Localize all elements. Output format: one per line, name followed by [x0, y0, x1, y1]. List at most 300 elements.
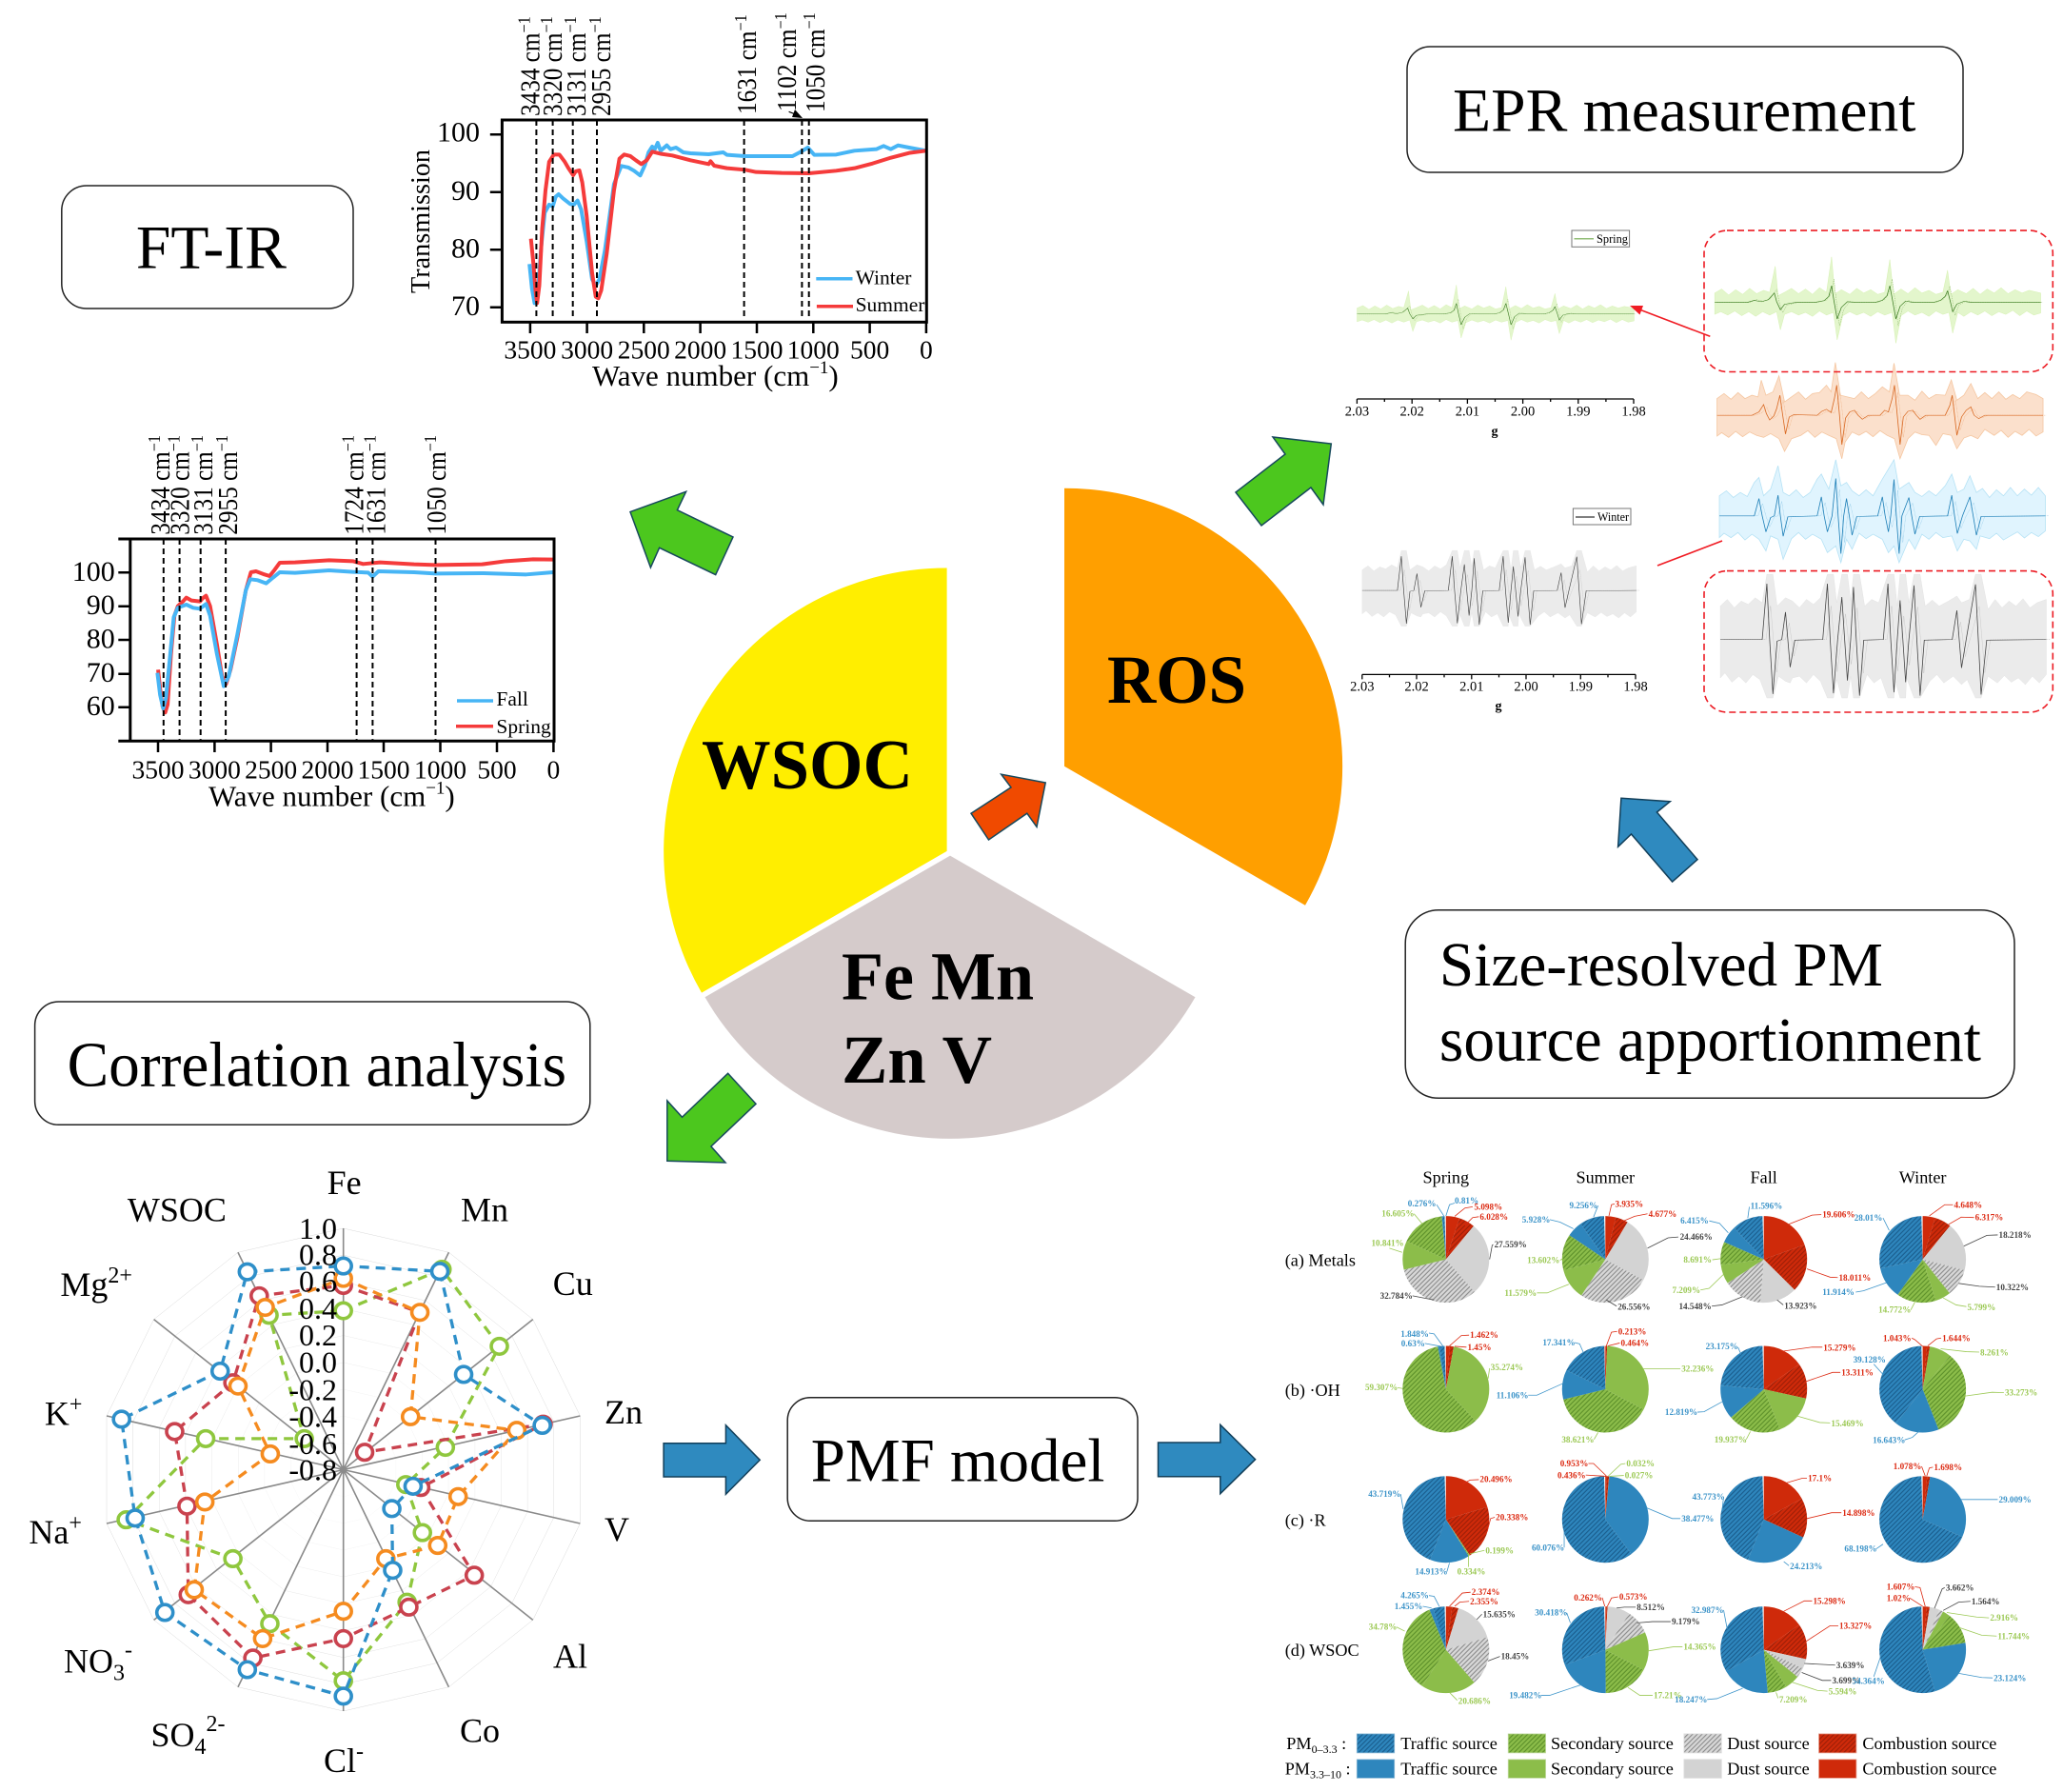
EPR spring axis: 1.98 — [1621, 404, 1646, 419]
pie: metals summer: 11.579% — [1504, 1288, 1537, 1298]
pie: R summer: 0.032% — [1626, 1459, 1655, 1468]
legend: PM size fractions and sources: Secondary source — [1551, 1760, 1674, 1779]
pie: R summer: 0.953% — [1560, 1459, 1588, 1468]
pie: R spring: 14.913% — [1415, 1566, 1448, 1576]
pie: R winter: 1.698% — [1934, 1463, 1962, 1472]
pie: WSOC fall: 3.639% — [1836, 1661, 1864, 1670]
pie: OH spring: 1.462% — [1470, 1330, 1498, 1340]
pie: WSOC fall: 3.699% — [1832, 1676, 1860, 1685]
pie: R spring: 20.496% — [1479, 1475, 1513, 1484]
pie: metals winter: 14.772% — [1878, 1305, 1911, 1315]
pie: R spring: 0.334% — [1458, 1566, 1485, 1576]
pie: metals winter: 11.914% — [1822, 1287, 1855, 1297]
EPR spring axis: 2.00 — [1511, 404, 1535, 419]
legend: PM size fractions and sources: Dust source — [1727, 1760, 1810, 1779]
heading box: EPR measurement — [1407, 47, 1963, 172]
chart: FT-IR winter and summer spectra: 3434 cm — [515, 33, 546, 116]
heading box: Size-resolved PM source apportionment — [1405, 910, 2014, 1098]
pie: WSOC summer — [1509, 1592, 1716, 1701]
pie: OH fall: 15.469% — [1831, 1419, 1864, 1428]
chart: FT-IR fall and spring spectra: 1631 cm — [361, 451, 391, 535]
pie: R fall: 14.898% — [1842, 1508, 1875, 1518]
pie: metals summer — [1504, 1199, 1713, 1312]
chart: FT-IR winter and summer spectra: 2955 cm — [586, 33, 616, 116]
chart: FT-IR winter and summer spectra: 3500 — [504, 335, 556, 365]
legend: PM size fractions and sources: Combustion source — [1862, 1760, 1996, 1779]
chart: FT-IR winter and summer spectra: −1 — [585, 16, 605, 33]
radar value scale: -0.2 — [288, 1372, 337, 1406]
pie: R summer — [1532, 1459, 1714, 1552]
season headers — [1423, 1168, 1946, 1187]
radar axis labels: - — [356, 1740, 364, 1764]
pie: metals summer: 9.256% — [1569, 1201, 1597, 1210]
segment: ROS — [1064, 488, 1342, 906]
pie: WSOC winter: 2.916% — [1990, 1613, 2018, 1623]
pie: WSOC spring: 1.455% — [1395, 1602, 1422, 1611]
series: orange — [187, 1270, 525, 1646]
EPR spring axis: 1.99 — [1566, 404, 1590, 419]
segment: WSOC — [664, 567, 947, 993]
pie: WSOC winter — [1853, 1583, 2030, 1686]
chart: FT-IR fall and spring spectra: 100 — [72, 556, 115, 587]
radar axis labels: SO — [150, 1716, 195, 1754]
pie: WSOC winter: 1.607% — [1887, 1583, 1914, 1592]
pie: R fall — [1693, 1474, 1875, 1571]
pie: metals spring: 5.098% — [1475, 1202, 1502, 1211]
chart: FT-IR winter and summer spectra: Summer — [856, 293, 924, 316]
pie: R fall: 24.213% — [1790, 1562, 1822, 1571]
EPR winter legend — [1573, 508, 1631, 525]
pie: OH spring: 0.63% — [1401, 1339, 1425, 1348]
radar axis labels: Mg — [60, 1265, 108, 1304]
season headers: Winter — [1899, 1168, 1946, 1187]
chart: FT-IR winter and summer spectra: 2500 — [618, 335, 670, 365]
arrow: WSOC to ROS — [971, 774, 1045, 840]
chart: FT-IR fall and spring spectra: Spring — [496, 715, 551, 738]
chart: FT-IR fall and spring spectra: 500 — [477, 755, 517, 785]
pie: metals fall: 8.691% — [1683, 1255, 1712, 1264]
pie: R winter: 68.198% — [1844, 1544, 1877, 1554]
arrow: to correlation analysis — [667, 1073, 756, 1163]
chart: FT-IR fall and spring spectra: 60 — [87, 690, 115, 722]
pie: metals winter: 4.648% — [1954, 1200, 1982, 1209]
row labels — [1285, 1251, 1359, 1661]
radar value scale: -0.6 — [288, 1426, 337, 1461]
chart: radar correlation — [29, 1164, 643, 1780]
pie: OH spring: 1.848% — [1400, 1329, 1429, 1339]
pie: R winter: 29.009% — [1999, 1495, 2032, 1504]
pie: R summer: 60.076% — [1532, 1543, 1564, 1552]
pie: OH summer: 32.236% — [1681, 1364, 1714, 1373]
spectrum: blue — [1719, 460, 2049, 563]
chart: FT-IR winter and summer spectra: 1000 — [787, 335, 840, 365]
radar axis labels: 2+ — [108, 1264, 132, 1288]
arrow: winter zoom pointer — [1657, 541, 1722, 566]
EPR spring legend — [1572, 230, 1630, 247]
radar axis labels: V — [605, 1510, 629, 1548]
radar axis labels: + — [69, 1511, 82, 1536]
legend: PM size fractions and sources: Dust source — [1727, 1734, 1810, 1753]
radar axis labels: Co — [460, 1712, 500, 1750]
chart: FT-IR winter and summer spectra: Winter — [856, 266, 911, 289]
chart: FT-IR winter and summer spectra: 1050 cm — [801, 30, 830, 112]
chart: FT-IR winter and summer spectra: 80 — [451, 232, 480, 265]
pie: R winter — [1844, 1462, 2032, 1554]
radar value scale: 0.6 — [299, 1264, 337, 1299]
pie: WSOC spring: 34.78% — [1369, 1622, 1397, 1631]
pie: OH fall — [1665, 1342, 1874, 1444]
chart: FT-IR winter and summer spectra: 3320 cm — [538, 33, 568, 116]
pie: metals spring: 32.784% — [1380, 1291, 1413, 1301]
chart: FT-IR fall and spring spectra: −1 — [165, 435, 184, 451]
EPR spring axis: 2.03 — [1345, 404, 1369, 419]
pie: metals winter — [1822, 1200, 2032, 1315]
chart: FT-IR fall and spring spectra: 3434 cm — [146, 451, 175, 535]
chart: FT-IR fall and spring spectra: −1 — [361, 435, 380, 451]
pie: metals fall: 13.923% — [1784, 1301, 1816, 1310]
radar axis labels: WSOC — [128, 1191, 227, 1229]
radar axis labels: 3 — [113, 1661, 125, 1685]
chart: FT-IR fall and spring spectra: 2955 cm — [213, 451, 243, 535]
pie: OH winter: 1.644% — [1942, 1333, 1971, 1343]
chart: FT-IR fall and spring spectra: 70 — [87, 657, 115, 688]
pie: metals fall: 18.011% — [1839, 1273, 1871, 1283]
radar value scale: 0.2 — [299, 1318, 337, 1352]
pie: R spring: 0.199% — [1485, 1545, 1514, 1555]
chart: FT-IR fall and spring spectra: −1 — [421, 435, 440, 451]
pie: WSOC winter: 23.124% — [1994, 1674, 2026, 1683]
pie: OH winter — [1854, 1333, 2037, 1445]
radar axis labels: Al — [553, 1637, 587, 1675]
pie: WSOC spring: 2.355% — [1470, 1597, 1498, 1606]
chart: FT-IR fall and spring spectra: 3320 cm — [165, 451, 195, 535]
pie: R fall: 43.773% — [1693, 1492, 1725, 1502]
pie: R summer: 38.477% — [1681, 1514, 1714, 1523]
pie: metals winter: 28.01% — [1855, 1213, 1882, 1223]
arrow: source apportionment to ROS — [1618, 798, 1697, 882]
pie: metals fall: 19.606% — [1822, 1210, 1855, 1220]
pie: WSOC fall: 13.327% — [1839, 1621, 1872, 1630]
chart curves — [529, 143, 926, 303]
segment: metals: Fe Mn — [842, 939, 1034, 1015]
callout: spring zoom box — [1704, 230, 2053, 371]
pie: metals summer: 5.928% — [1522, 1215, 1550, 1225]
chart: FT-IR winter and summer spectra: −1 — [771, 12, 790, 29]
arrow: to EPR — [1236, 437, 1331, 526]
pie: R spring — [1368, 1475, 1528, 1576]
chart: FT-IR fall and spring spectra: 2000 — [301, 755, 354, 785]
pie: WSOC summer: 8.512% — [1637, 1603, 1665, 1612]
pie: WSOC fall: 7.209% — [1779, 1695, 1808, 1704]
radar axis labels: Zn — [605, 1393, 643, 1431]
legend: PM size fractions and sources: 0–3.3 — [1312, 1742, 1338, 1756]
chart: FT-IR fall and spring spectra: 1000 — [414, 755, 466, 785]
pie: OH spring: 59.307% — [1365, 1383, 1398, 1392]
legend: PM size fractions and sources: Secondary source — [1551, 1734, 1674, 1753]
chart: FT-IR winter and summer spectra: −1 — [809, 358, 828, 378]
pie: WSOC winter: 1.564% — [1972, 1597, 2000, 1606]
pie: WSOC winter: 3.662% — [1946, 1583, 1974, 1592]
radar value scale: -0.4 — [288, 1400, 337, 1434]
panel: PMF source pie charts — [1285, 1168, 2037, 1781]
chart: FT-IR fall and spring spectra: −1 — [145, 435, 164, 451]
heading box: Correlation analysis — [35, 1002, 590, 1125]
chart: FT-IR fall and spring spectra: Wave number (cm — [208, 780, 426, 813]
pie: OH fall: 23.175% — [1706, 1342, 1738, 1351]
segment: metals — [704, 856, 1196, 1139]
pie: metals fall: 7.209% — [1672, 1285, 1700, 1295]
pie: WSOC summer: 14.365% — [1683, 1643, 1716, 1652]
radar value scale: 0.8 — [299, 1238, 337, 1272]
chart: FT-IR winter and summer spectra: 1631 cm — [732, 31, 762, 114]
chart: FT-IR fall and spring spectra: −1 — [188, 435, 207, 451]
pie: WSOC winter: 1.02% — [1887, 1593, 1911, 1603]
pie: WSOC fall: 15.298% — [1813, 1596, 1846, 1605]
legend: PM size fractions and sources: Traffic source — [1400, 1760, 1498, 1779]
pie: OH spring: 1.45% — [1467, 1343, 1492, 1352]
chart: FT-IR fall and spring spectra: −1 — [212, 435, 231, 451]
pie: WSOC spring — [1369, 1587, 1529, 1706]
pie: WSOC spring: 4.265% — [1400, 1591, 1429, 1601]
pie: OH fall: 12.819% — [1665, 1407, 1697, 1417]
legend: PM size fractions and sources: PM — [1286, 1734, 1312, 1753]
EPR spring axis: 2.01 — [1456, 404, 1479, 419]
chart: FT-IR fall and spring spectra: −1 — [426, 779, 445, 799]
heading box: PMF model: PMF model — [811, 1427, 1104, 1496]
pie: R spring: 43.719% — [1368, 1489, 1400, 1499]
season headers: Spring — [1423, 1168, 1469, 1187]
pie: OH winter: 16.643% — [1873, 1436, 1905, 1445]
row labels: (c) ·R — [1285, 1511, 1326, 1531]
radar axis labels: + — [69, 1392, 82, 1417]
EPR winter axis: 2.02 — [1404, 679, 1429, 694]
chart: FT-IR winter and summer spectra: 3131 cm — [562, 33, 591, 116]
chart: FT-IR winter and summer spectra: 0 — [920, 335, 933, 365]
pie: metals summer: 26.556% — [1617, 1303, 1650, 1312]
pie: metals winter: 5.799% — [1968, 1303, 1995, 1312]
pie: OH winter: 1.043% — [1883, 1333, 1912, 1343]
radar value scale: 0.0 — [299, 1344, 337, 1379]
chart: FT-IR winter and summer spectra: −1 — [561, 16, 580, 33]
season headers: Summer — [1576, 1168, 1635, 1187]
chart: FT-IR winter and summer spectra — [407, 12, 933, 392]
pie: OH summer: 11.106% — [1497, 1390, 1528, 1400]
EPR spring axis — [1345, 399, 1646, 439]
row labels: (d) WSOC — [1285, 1641, 1359, 1661]
radar axis labels: 4 — [195, 1735, 207, 1760]
pie: WSOC spring: 20.686% — [1458, 1697, 1491, 1706]
pie: WSOC spring: 2.374% — [1472, 1587, 1499, 1597]
radar axis labels: Cu — [553, 1264, 593, 1303]
pie: metals fall: 14.548% — [1679, 1302, 1712, 1311]
legend: PM size fractions and sources: PM — [1285, 1760, 1310, 1779]
EPR spring legend: Spring — [1597, 232, 1629, 246]
chart: FT-IR fall and spring spectra: 90 — [87, 589, 115, 621]
chart: FT-IR winter and summer spectra: 1102 cm — [772, 29, 802, 111]
radar axis labels: Fe — [327, 1164, 362, 1202]
pie: R winter: 1.078% — [1894, 1462, 1921, 1471]
chart: FT-IR fall and spring spectra: 2500 — [245, 755, 297, 785]
pie: OH fall: 19.937% — [1715, 1435, 1747, 1444]
panel: central pie diagram — [664, 488, 1342, 1139]
pie: metals spring: 10.841% — [1371, 1239, 1404, 1248]
chart: FT-IR winter and summer spectra: −1 — [537, 16, 556, 33]
chart: FT-IR winter and summer spectra: 1500 — [731, 335, 783, 365]
heading box: PMF model — [787, 1398, 1138, 1521]
pie: WSOC summer: 0.573% — [1619, 1592, 1647, 1602]
chart: FT-IR fall and spring spectra — [72, 435, 560, 813]
heading box: Size-resolved PM source apportionment: source apportionment — [1439, 1006, 1981, 1075]
radar value scale: 1.0 — [299, 1211, 337, 1245]
pie: WSOC summer: 9.179% — [1672, 1617, 1700, 1626]
pie: metals spring — [1371, 1196, 1527, 1301]
radar value scale: 0.4 — [299, 1291, 337, 1325]
pie: metals summer: 3.935% — [1616, 1199, 1643, 1208]
arrow: correlation to PMF — [664, 1425, 760, 1494]
heading box: FT-IR: FT-IR — [136, 214, 288, 283]
radar axis labels: Na — [29, 1513, 69, 1551]
pie: WSOC summer: 30.418% — [1535, 1608, 1567, 1618]
chart: FT-IR fall and spring spectra: 1050 cm — [422, 451, 451, 535]
pie: R spring: 20.338% — [1496, 1513, 1528, 1523]
radar plot — [107, 1228, 580, 1711]
series: blue — [113, 1258, 550, 1704]
heading box: EPR measurement: EPR measurement — [1453, 77, 1915, 146]
pie: WSOC spring: 15.635% — [1483, 1609, 1516, 1619]
pie: R summer: 0.027% — [1625, 1471, 1653, 1481]
pie: metals summer: 24.466% — [1680, 1232, 1713, 1242]
chart: FT-IR winter and summer spectra: 70 — [451, 290, 480, 322]
pie: metals winter: 18.218% — [1999, 1230, 2032, 1240]
chart: FT-IR winter and summer spectra: −1 — [515, 16, 534, 33]
pie: metals spring: 27.559% — [1495, 1240, 1527, 1249]
EPR winter axis — [1350, 674, 1648, 714]
pie: metals winter: 10.322% — [1996, 1283, 2029, 1292]
chart: FT-IR winter and summer spectra: Wave number (cm — [592, 359, 809, 392]
heading box: FT-IR — [62, 186, 353, 309]
pie: R summer: 0.436% — [1557, 1471, 1586, 1481]
radar axis labels: Cl — [324, 1742, 356, 1780]
heading box: Correlation analysis: Correlation analysis — [68, 1030, 566, 1101]
pie: WSOC summer: 19.482% — [1509, 1691, 1541, 1701]
pie: OH spring: 35.274% — [1491, 1363, 1523, 1372]
pie: OH winter: 39.128% — [1854, 1355, 1886, 1364]
radar axis labels: 2- — [207, 1712, 226, 1737]
pie: metals summer: 13.602% — [1527, 1256, 1559, 1265]
pie: metals fall: 6.415% — [1680, 1216, 1709, 1225]
chart: FT-IR winter and summer spectra: 90 — [451, 175, 480, 207]
spectrum: orange — [1717, 363, 2046, 459]
chart: FT-IR winter and summer spectra: 2000 — [674, 335, 726, 365]
season headers: Fall — [1751, 1168, 1777, 1187]
legend: PM size fractions and sources: Traffic source — [1400, 1734, 1498, 1753]
row labels: (a) Metals — [1285, 1251, 1356, 1271]
pie: WSOC fall: 32.987% — [1691, 1605, 1724, 1615]
radar axis labels: K — [45, 1394, 69, 1432]
pie: WSOC spring: 18.45% — [1501, 1652, 1529, 1662]
pie: WSOC winter: 11.744% — [1997, 1632, 2030, 1642]
arrow: to FT-IR — [630, 491, 733, 575]
series: green — [118, 1262, 507, 1689]
pie: WSOC summer: 17.21% — [1654, 1691, 1682, 1701]
chart: FT-IR winter and summer spectra: Transmission — [407, 149, 436, 293]
chart curves — [157, 559, 553, 712]
EPR spring axis: 2.02 — [1400, 404, 1424, 419]
radar value scale: -0.8 — [288, 1452, 337, 1486]
callout: winter zoom box — [1704, 571, 2053, 712]
pie: metals fall: 11.596% — [1751, 1202, 1782, 1211]
pie: metals summer: 4.677% — [1649, 1209, 1676, 1219]
pie: OH fall: 13.311% — [1841, 1367, 1874, 1377]
pie: WSOC fall — [1675, 1596, 1872, 1704]
segment: WSOC: WSOC — [702, 727, 913, 805]
radar axis labels: NO — [64, 1642, 113, 1680]
pie: OH summer — [1497, 1326, 1714, 1444]
pie: OH fall: 15.279% — [1823, 1343, 1856, 1352]
pie: OH summer: 0.213% — [1618, 1326, 1646, 1336]
legend: PM size fractions and sources: : — [1338, 1734, 1346, 1753]
chart: EPR spectra — [1345, 230, 2053, 714]
pie: OH spring — [1365, 1329, 1523, 1411]
chart: FT-IR winter and summer spectra: 3000 — [561, 335, 613, 365]
chart: FT-IR fall and spring spectra: ) — [445, 780, 455, 813]
pie: WSOC fall: 5.594% — [1829, 1687, 1856, 1697]
pie: metals winter: 6.317% — [1975, 1213, 2003, 1223]
EPR winter axis: 2.01 — [1459, 679, 1483, 694]
legend: PM size fractions and sources: 3.3–10 — [1310, 1767, 1341, 1781]
chart: FT-IR fall and spring spectra: Fall — [496, 687, 528, 710]
chart: FT-IR fall and spring spectra: 0 — [547, 755, 560, 785]
EPR spring axis: g — [1491, 425, 1498, 439]
segment: ROS: ROS — [1107, 642, 1246, 718]
signals — [1357, 257, 2050, 698]
legend: PM size fractions and sources: Combustion source — [1862, 1734, 1996, 1753]
pie: OH summer: 38.621% — [1561, 1435, 1595, 1444]
chart: FT-IR fall and spring spectra: 3000 — [188, 755, 241, 785]
pie: OH summer: 0.464% — [1620, 1338, 1649, 1347]
segment: metals: Zn V — [842, 1022, 992, 1098]
chart: FT-IR fall and spring spectra: 3500 — [131, 755, 185, 785]
chart: FT-IR fall and spring spectra: 3131 cm — [188, 451, 218, 535]
chart: FT-IR fall and spring spectra: −1 — [339, 435, 358, 451]
pie: metals spring: 0.81% — [1455, 1196, 1478, 1205]
arrow: spring zoom pointer — [1630, 306, 1710, 336]
legend: PM size fractions and sources: : — [1341, 1760, 1351, 1779]
EPR winter legend: Winter — [1597, 510, 1630, 524]
chart: FT-IR fall and spring spectra: 80 — [87, 623, 115, 655]
radar axis labels: Mn — [461, 1191, 508, 1229]
radar value scale — [288, 1211, 337, 1486]
chart: FT-IR fall and spring spectra: 1724 cm — [339, 451, 369, 535]
pie: OH winter: 8.261% — [1980, 1347, 2009, 1357]
heading box: Size-resolved PM source apportionment: Size-resolved PM — [1439, 930, 1883, 1000]
chart: FT-IR winter and summer spectra: 500 — [850, 335, 889, 365]
pie: metals spring: 16.605% — [1381, 1208, 1414, 1218]
legend: PM size fractions and sources — [1285, 1734, 1996, 1781]
chart: FT-IR winter and summer spectra: ) — [828, 359, 839, 392]
pie: metals fall — [1672, 1202, 1871, 1311]
arrow: PMF to source apportionment — [1158, 1424, 1256, 1494]
EPR winter axis: 1.98 — [1623, 679, 1648, 694]
pie: WSOC summer: 0.262% — [1574, 1593, 1602, 1603]
pie: WSOC winter: 54.364% — [1853, 1677, 1885, 1686]
EPR winter axis: 2.03 — [1350, 679, 1374, 694]
EPR winter axis: g — [1495, 700, 1502, 714]
chart: FT-IR winter and summer spectra: −1 — [731, 14, 750, 31]
chart: FT-IR winter and summer spectra: −1 — [800, 12, 819, 30]
radar axis labels — [29, 1164, 643, 1780]
EPR winter axis: 1.99 — [1569, 679, 1593, 694]
